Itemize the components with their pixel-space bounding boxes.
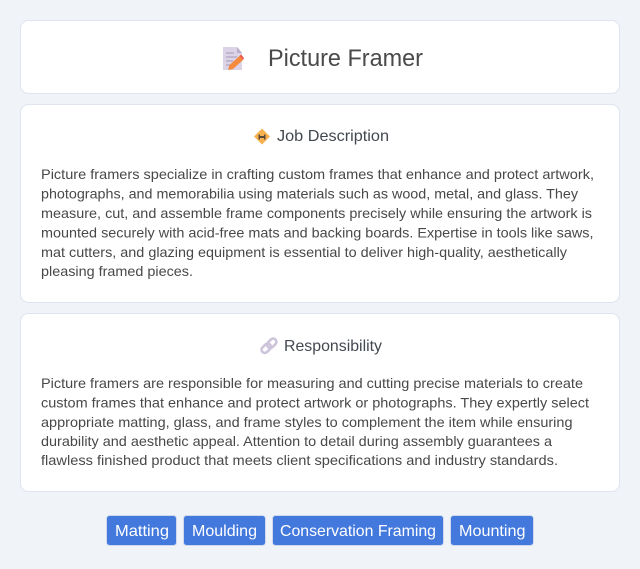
icon: diamond road sign <box>254 128 270 144</box>
icon: document with pencil <box>223 47 244 70</box>
tag: Matting <box>106 516 176 546</box>
text block: job description: mounted securely with acid-free mats and backing boards. Expertise in tools like saws, <box>41 224 594 240</box>
text block: job description: Picture framers specialize in crafting custom frames that enhance and protect artwork, <box>41 166 594 182</box>
tag: Conservation Framing: Conservation Framing <box>280 523 436 540</box>
heading: Picture Framer: Picture Framer <box>268 45 423 72</box>
heading: Job Description: Job Description <box>277 128 389 145</box>
text block: job description: photographs, and memorabilia using materials such as wood, metal, and glass. They <box>41 186 578 202</box>
heading: Responsibility: Responsibility <box>284 338 382 355</box>
text block: responsibility: appropriate matting, glass, and frame styles to complement the item while ensuring <box>41 414 572 430</box>
tag: Moulding <box>184 516 266 546</box>
text block: responsibility: flawless finished product that meets client specifications and industry standards. <box>41 452 558 468</box>
text block: job description: mat cutters, and glazing equipment is essential to deliver high-quality, aesthetically <box>41 244 567 260</box>
tag: Matting: Matting <box>115 523 169 540</box>
text block: responsibility: durability and aesthetic appeal. Attention to detail during assembly guarantees a <box>41 433 552 449</box>
icon: chain link <box>260 337 278 354</box>
panel: title <box>20 20 620 94</box>
text block: responsibility: Picture framers are responsible for measuring and cutting precise materials to create <box>41 375 583 391</box>
text block: responsibility: custom frames that enhance and protect artwork or photographs. They expertly select <box>41 394 589 410</box>
text block: responsibility <box>41 375 589 468</box>
text block: job description: measure, cut, and assemble frame components precisely while ensuring the artwork is <box>41 205 592 221</box>
panel: job description <box>20 104 620 302</box>
tag: Mounting <box>450 516 534 546</box>
tag: Mounting: Mounting <box>459 523 526 540</box>
text block: job description: pleasing framed pieces. <box>41 263 193 279</box>
tag: Conservation Framing <box>272 516 444 546</box>
tag: Moulding: Moulding <box>192 523 257 540</box>
text block: job description <box>41 166 594 279</box>
panel: responsibility <box>20 314 620 492</box>
